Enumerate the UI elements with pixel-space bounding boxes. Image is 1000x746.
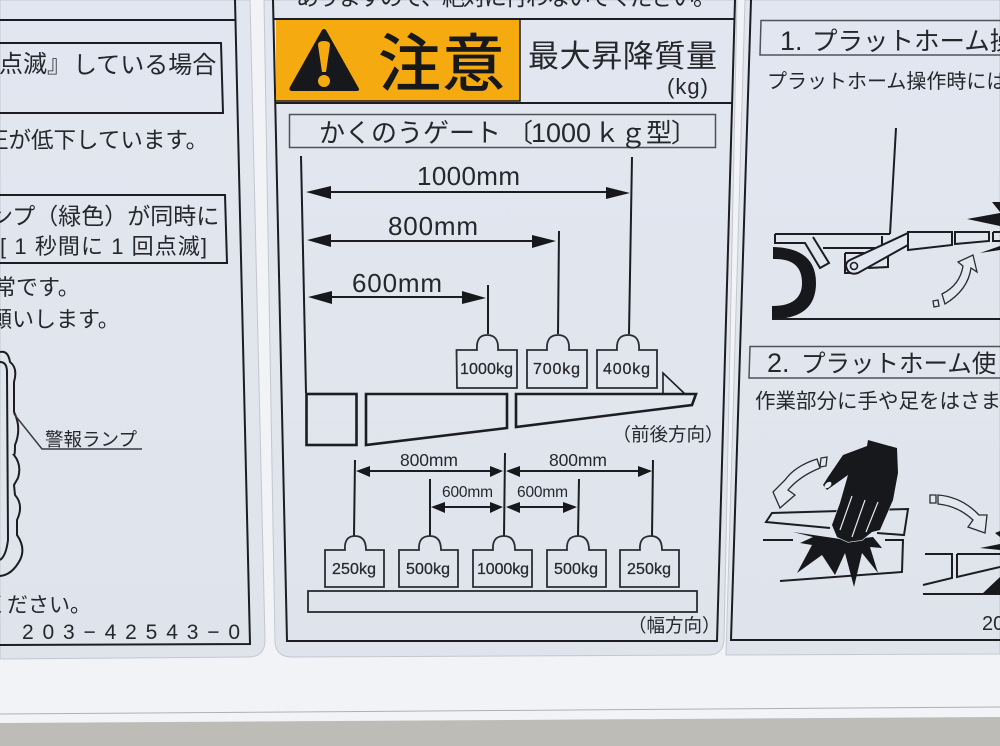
label: width direction: （幅方向） bbox=[628, 615, 721, 636]
illustration: hand pinched bbox=[763, 440, 1000, 594]
heading: max lift mass: 最大昇降質量 bbox=[528, 39, 717, 74]
platform section bbox=[366, 394, 507, 445]
weight: 400kg bbox=[597, 335, 657, 388]
datum lines bbox=[354, 453, 653, 536]
dimension: left 800mm: 800mm bbox=[400, 450, 458, 470]
text: hands and feet: 作業部分に手や足をはさま bbox=[755, 390, 1000, 413]
weight: 1000kg center bbox=[473, 536, 532, 587]
truck body block bbox=[306, 394, 356, 445]
weight: 500kg left: 500kg bbox=[406, 561, 450, 578]
weight: 250kg right bbox=[620, 536, 679, 587]
weight: 400kg: 400kg bbox=[603, 361, 650, 378]
heading box 1: 1. bbox=[780, 26, 803, 56]
info box: green lamp: [ 1 秒間に 1 回点滅] bbox=[0, 234, 207, 259]
finger lines bbox=[840, 496, 878, 537]
warning box: flashing: している場合 bbox=[73, 52, 216, 79]
arrow: down left bbox=[773, 457, 827, 508]
weight: 700kg: 700kg bbox=[533, 361, 580, 378]
arrow: upward bbox=[933, 255, 977, 307]
title box: ｇ bbox=[620, 118, 646, 148]
dimension: 800mm bbox=[307, 211, 556, 248]
arrow: down right bbox=[930, 495, 987, 533]
heading box 2: 2. bbox=[767, 348, 790, 378]
dimension: 1000mm: 1000mm bbox=[417, 161, 520, 191]
illustration: tail lift raising bbox=[772, 128, 1000, 319]
hand bbox=[823, 440, 898, 542]
weight: 500kg left bbox=[399, 536, 458, 587]
caution banner bbox=[276, 20, 520, 101]
icon: warning triangle bbox=[289, 29, 359, 91]
dimension: 1000mm bbox=[306, 161, 630, 199]
weight: 1000kg bbox=[456, 335, 517, 388]
weight: 700kg bbox=[527, 335, 587, 388]
heading box 2 bbox=[749, 346, 1000, 378]
ground line bbox=[772, 318, 1000, 320]
label: warning lamp: 警報ランプ bbox=[45, 429, 137, 450]
platform outlines bbox=[763, 509, 908, 581]
impact burst bbox=[967, 202, 1000, 253]
label: warning lamp bbox=[14, 414, 142, 450]
unit: (kg) bbox=[667, 74, 708, 99]
title box: 〕 bbox=[671, 118, 697, 148]
info box: green lamp bbox=[0, 195, 227, 263]
dimension: 600mm bbox=[308, 268, 486, 304]
weight: 500kg right bbox=[547, 536, 606, 587]
weight: 1000kg: 1000kg bbox=[460, 361, 513, 378]
dimension: 600mm: 600mm bbox=[352, 268, 442, 298]
left panel border bbox=[0, 0, 250, 645]
left panel bbox=[0, 0, 250, 645]
weight: 500kg right: 500kg bbox=[554, 561, 598, 578]
title box: 型 bbox=[646, 118, 672, 148]
datum lines bbox=[301, 156, 632, 393]
title box: 1000 bbox=[531, 118, 591, 148]
caution banner: 注意 bbox=[378, 30, 505, 100]
stopper flap bbox=[663, 373, 685, 394]
icon: scalloped lamp outline bbox=[0, 352, 22, 576]
center panel border bbox=[273, 0, 735, 641]
dimension: left 600mm: 600mm bbox=[442, 484, 493, 501]
title box: ｋ bbox=[594, 118, 620, 148]
platform tip section bbox=[516, 394, 696, 427]
truck wall bbox=[890, 128, 896, 234]
weight: 250kg left: 250kg bbox=[332, 561, 376, 578]
platform bar bbox=[308, 591, 697, 612]
longitudinal load chart bbox=[301, 156, 724, 445]
weight: 1000kg center: 1000kg bbox=[477, 561, 529, 578]
dimension: right 600mm bbox=[506, 484, 577, 513]
title box: 〔 bbox=[507, 118, 533, 148]
second burst bbox=[980, 531, 1000, 594]
platform sections bbox=[908, 232, 1000, 250]
heading box 2: プラットホーム使 bbox=[801, 350, 996, 378]
heading box 1 bbox=[760, 20, 1000, 56]
title box: かくのうゲート bbox=[319, 118, 501, 148]
right panel border bbox=[731, 0, 1000, 640]
dimension: 800mm: 800mm bbox=[388, 211, 478, 241]
warning box: flashing bbox=[0, 43, 223, 113]
sticker: center bbox=[264, 0, 737, 657]
dimension: right 800mm bbox=[506, 450, 652, 477]
text: platform operation: プラットホーム操作時には bbox=[767, 70, 1000, 93]
part number: 203−42543−0 bbox=[22, 621, 240, 644]
title box bbox=[290, 114, 716, 148]
weight: 250kg right: 250kg bbox=[627, 561, 671, 578]
truck chassis bbox=[775, 234, 890, 273]
sticker: left bbox=[0, 0, 265, 659]
dimension: right 600mm: 600mm bbox=[517, 484, 568, 501]
dimension: left 600mm bbox=[431, 484, 503, 513]
lift arm bbox=[846, 233, 908, 274]
warning box: flashing: 点滅』 bbox=[0, 51, 71, 78]
center panel bbox=[273, 0, 735, 641]
wheel bbox=[772, 247, 816, 319]
dimension: right 800mm: 800mm bbox=[549, 450, 607, 470]
weight: 250kg left bbox=[325, 536, 384, 587]
dimension: left 800mm bbox=[356, 450, 503, 477]
right panel bbox=[731, 0, 1000, 640]
impact burst bbox=[793, 532, 882, 587]
second platform bbox=[923, 554, 1000, 594]
thumbnail bbox=[823, 481, 833, 489]
sticker: right bbox=[726, 0, 1000, 655]
label: front-rear direction: （前後方向） bbox=[612, 424, 724, 445]
lateral load chart bbox=[308, 450, 721, 636]
